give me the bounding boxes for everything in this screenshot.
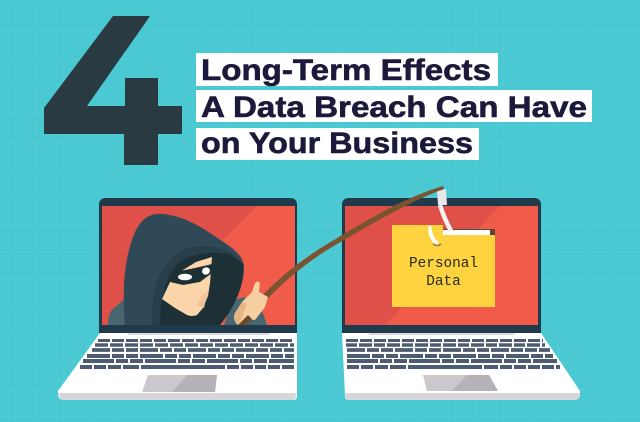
left laptop keyboard (80, 340, 294, 367)
right laptop (342, 189, 580, 400)
right laptop screen (342, 198, 541, 333)
mask (170, 264, 212, 285)
right laptop base (342, 333, 580, 400)
title (196, 53, 592, 160)
face (162, 257, 212, 316)
title: on Your Business (201, 127, 473, 160)
folder: personal data: Personal (409, 256, 478, 272)
fishing rod (238, 186, 444, 325)
left laptop trackpad (142, 375, 217, 392)
hacker hand (234, 282, 268, 325)
title: Long-Term Effects (201, 54, 491, 87)
title: A Data Breach Can Have (201, 91, 587, 124)
left laptop base (58, 333, 297, 400)
fishing hook (429, 189, 451, 246)
folder: personal data (392, 225, 495, 307)
hacker figure (108, 214, 267, 325)
right laptop trackpad (423, 375, 498, 391)
left laptop screen (99, 198, 297, 333)
left laptop (58, 198, 297, 400)
right laptop keyboard (346, 340, 560, 367)
folder: personal data: Data (426, 274, 461, 290)
